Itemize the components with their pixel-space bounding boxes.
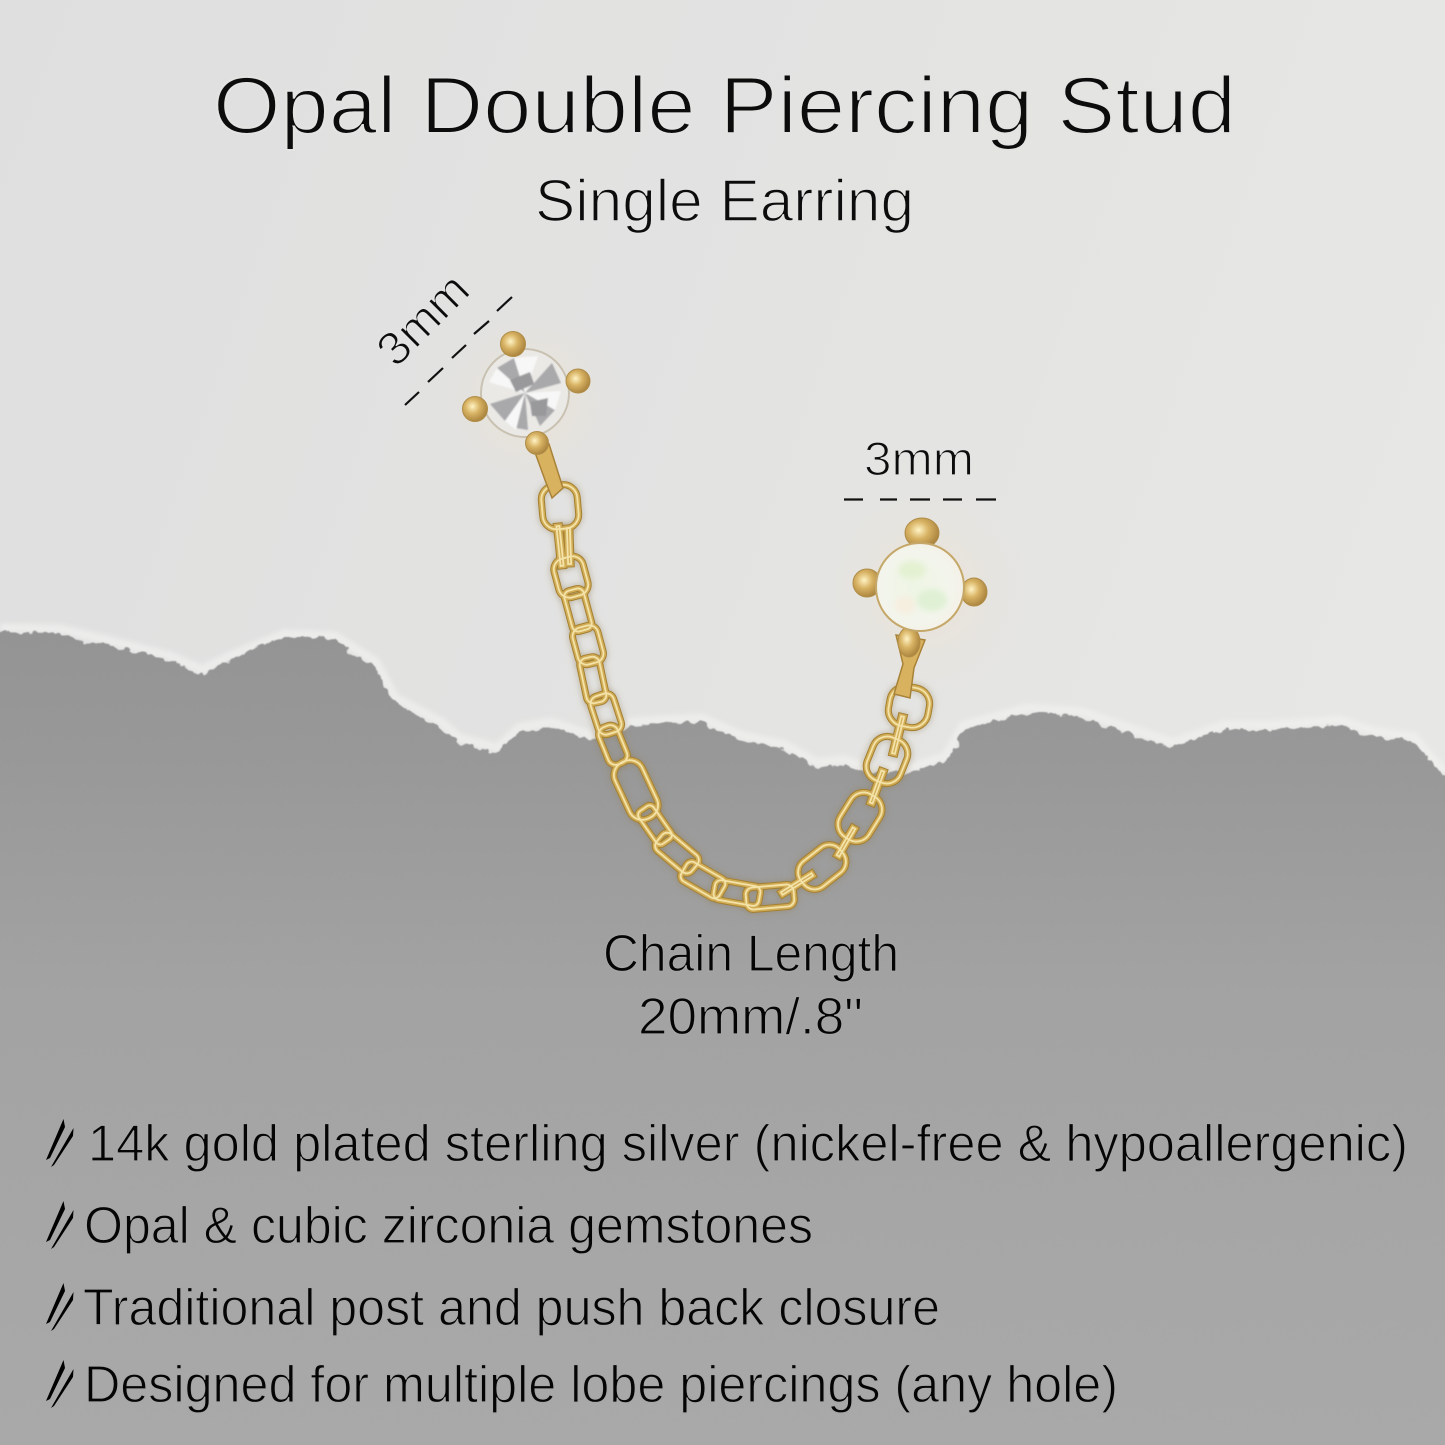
decoration: torn paper white edge xyxy=(0,628,1445,772)
connector bar: opal stud xyxy=(894,635,925,698)
prongs xyxy=(462,332,590,454)
icon: cubic zirconia stud xyxy=(462,332,590,498)
dashed dimension line: opal stone xyxy=(844,498,996,501)
measurement label: left stone 3mm xyxy=(366,262,512,405)
title: Opal Double Piercing Stud xyxy=(213,61,1236,151)
gem base ring xyxy=(481,349,569,437)
icon: double slash xyxy=(46,1360,74,1408)
chain xyxy=(540,484,932,910)
bullet 3: Traditional post and push back closure xyxy=(83,1279,940,1337)
subtitle: Single Earring xyxy=(535,168,914,234)
prongs xyxy=(853,518,987,657)
dashed dimension line: left stone xyxy=(405,297,512,405)
chain length label: 20mm/.8" xyxy=(638,988,863,1046)
opal stone xyxy=(876,543,964,631)
icon: opal stud xyxy=(853,518,987,698)
decoration: warm glow around the earring xyxy=(435,305,625,495)
opal colour flecks xyxy=(895,561,947,614)
icon: double slash xyxy=(46,1283,74,1331)
bullet 1: 14k gold plated sterling silver (nickel-free & hypoallergenic) xyxy=(88,1115,1408,1173)
measurement label: left stone 3mm: 3mm xyxy=(366,262,479,376)
measurement label: opal stone 3mm: 3mm xyxy=(864,432,974,485)
icon: double slash xyxy=(46,1201,74,1249)
bullet 2: Opal & cubic zirconia gemstones xyxy=(84,1197,813,1255)
connector bar: left stud xyxy=(533,444,563,498)
chain length label xyxy=(603,925,899,1046)
panel: torn grey paper lower section xyxy=(0,632,1445,1445)
feature list xyxy=(46,1115,1408,1414)
bullet 4: Designed for multiple lobe piercings (any hole) xyxy=(84,1356,1118,1414)
chain length label: Chain Length xyxy=(603,925,899,983)
decoration: warm glow around the opal stud xyxy=(820,480,1030,700)
gem facets xyxy=(489,356,561,430)
icon: double slash xyxy=(46,1119,74,1167)
